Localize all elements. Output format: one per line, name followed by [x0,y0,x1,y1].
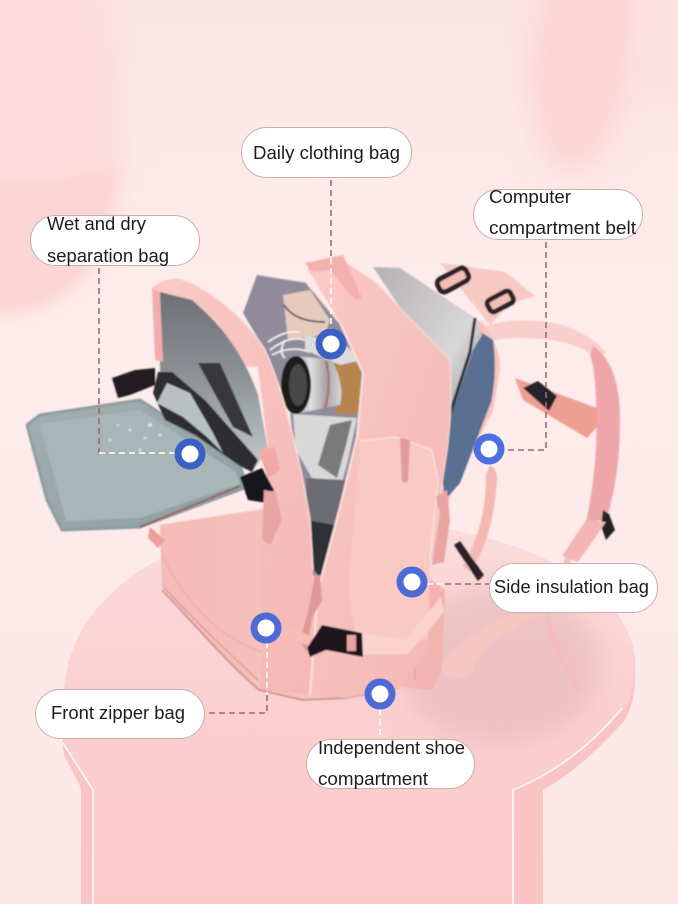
top handle [305,255,362,300]
pedestal [62,520,635,904]
label: Side insulation bag: Side insulation bag [494,577,649,597]
center front panel [307,262,451,698]
marker: side insulation bag [396,566,428,598]
front pocket [350,437,450,640]
shoulder strap [436,320,620,691]
label: Computer compartment belt: compartment belt [489,218,636,238]
label: Independent shoe compartment [306,738,474,789]
left flap buckle [112,368,155,398]
marker: daily clothing bag [316,328,346,360]
label: Computer compartment belt [474,187,642,240]
left flap panel [152,279,313,695]
label: Independent shoe compartment: Independent shoe [318,738,465,758]
lower body [160,500,445,700]
label: Daily clothing bag [242,128,412,178]
hat [283,290,330,340]
marker: computer compartment belt [474,434,504,464]
waist strap and buckle [278,597,444,657]
backpack illustration [27,255,620,700]
back panel rim [413,282,500,560]
marker: front zipper bag [250,612,282,644]
marker: wet and dry separation bag [174,438,206,470]
open lid [27,400,247,548]
blue interior [438,325,495,500]
label: Independent shoe compartment: compartment [318,769,428,789]
label: Side insulation bag [490,564,658,612]
label: Front zipper bag [36,690,204,738]
main opening interior [243,275,363,580]
label: Wet and dry separation bag [30,214,200,266]
zipper pulls [262,490,282,545]
label: Wet and dry separation bag: separation bag [47,246,169,266]
label: Front zipper bag: Front zipper bag [51,703,185,723]
camera lens [281,355,341,414]
marker: independent shoe compartment [364,678,396,710]
label: Computer compartment belt: Computer [489,187,571,207]
cables [268,332,310,358]
label: Wet and dry separation bag: Wet and dry [47,214,146,234]
flap inner lining [160,292,268,472]
callout lines [99,180,546,739]
label: Daily clothing bag: Daily clothing bag [253,143,400,163]
top straps and black loops [436,263,535,325]
waterproof pouch [153,363,258,472]
brown box [335,362,361,414]
clothes [293,414,357,580]
laptop [373,267,482,450]
